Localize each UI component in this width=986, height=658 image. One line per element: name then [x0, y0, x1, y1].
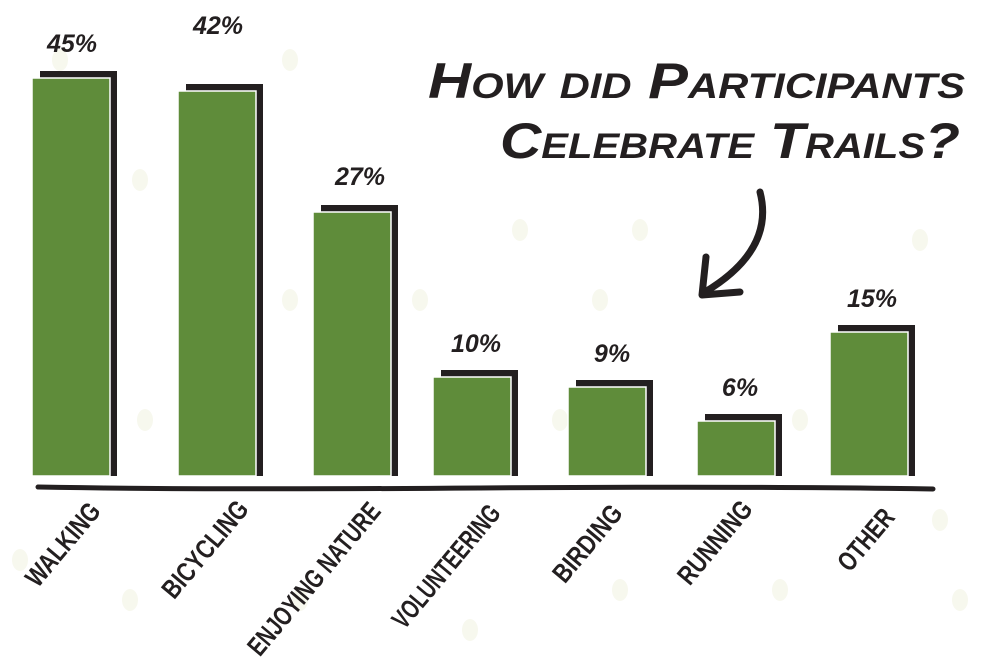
arrow: [702, 192, 763, 295]
title: How did Participants: [428, 53, 965, 109]
bar: walking: [32, 30, 117, 476]
bar: running: [697, 374, 782, 476]
bar: other: [830, 285, 915, 476]
bar: birding: [568, 340, 653, 476]
bar: enjoying nature: [313, 163, 398, 476]
category labels: VOLUNTEERING: [386, 499, 507, 634]
bar: volunteering: [433, 330, 518, 476]
category labels: WALKING: [19, 497, 107, 592]
axis line: [38, 487, 933, 489]
bar: bicycling: [178, 12, 263, 476]
category labels: [19, 495, 901, 658]
bar: enjoying nature: 27%: [334, 163, 385, 191]
category labels: RUNNING: [671, 495, 759, 590]
bar: running: 6%: [722, 374, 758, 402]
bar: bicycling: 42%: [192, 12, 243, 40]
title: Celebrate Trails?: [500, 113, 960, 169]
category labels: BICYCLING: [156, 495, 255, 604]
bar: other: 15%: [847, 285, 897, 313]
bar: walking: 45%: [46, 30, 97, 58]
title: [428, 53, 965, 169]
category labels: ENJOYING NATURE: [241, 497, 387, 658]
category labels: OTHER: [831, 503, 901, 577]
category labels: BIRDING: [546, 499, 629, 588]
bar: volunteering: 10%: [451, 330, 501, 358]
bar: birding: 9%: [594, 340, 630, 368]
